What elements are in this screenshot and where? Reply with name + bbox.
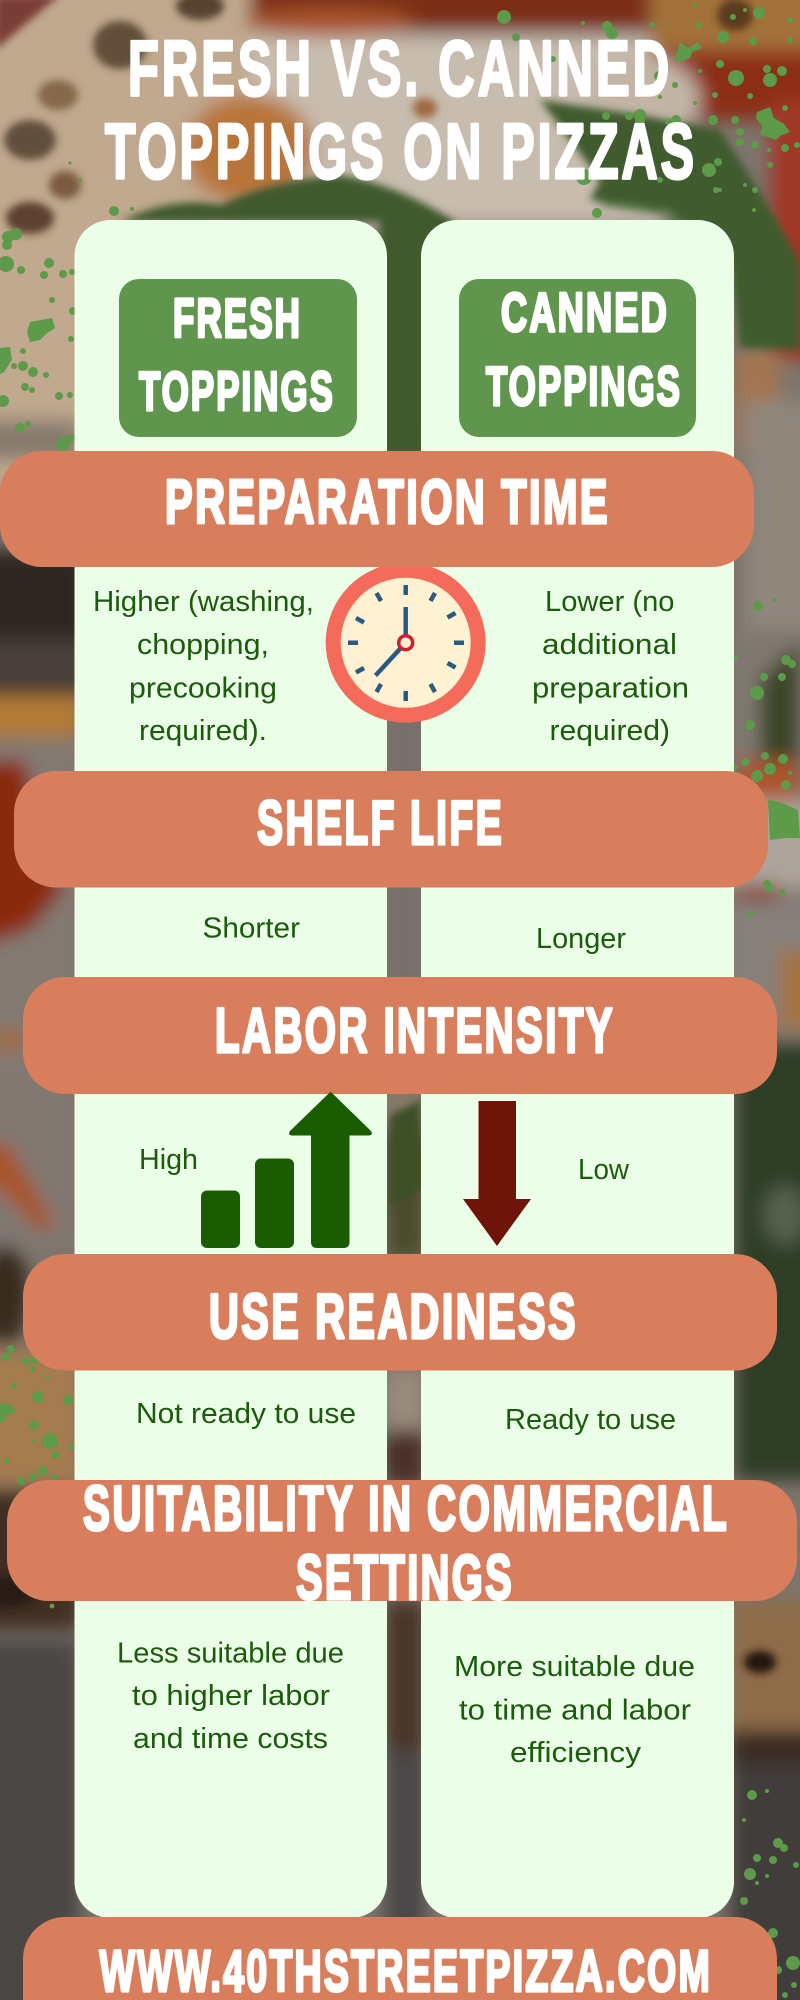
text: more suitable	[454, 1651, 695, 1769]
heading: fresh toppings: FRESH	[173, 287, 302, 349]
panel: canned toppings column	[421, 220, 734, 1918]
text: less suitable	[117, 1638, 344, 1755]
text: less suitable: and time costs	[133, 1723, 328, 1755]
heading: canned toppings: TOPPINGS	[486, 355, 682, 417]
text: fresh preparation time	[93, 586, 314, 747]
text: more suitable: to time and labor	[459, 1694, 691, 1726]
text: more suitable: efficiency	[510, 1737, 642, 1769]
banner: shelf life: SHELF LIFE	[257, 789, 504, 858]
text: low: Low	[578, 1154, 630, 1186]
text: canned preparation time: preparation	[532, 672, 689, 704]
text: less suitable: to higher labor	[132, 1680, 330, 1712]
text: canned preparation time: additional	[542, 629, 677, 661]
heading: canned toppings: CANNED	[501, 281, 669, 343]
icon: clock	[326, 563, 486, 723]
text: fresh preparation time: precooking	[129, 672, 277, 704]
title	[105, 24, 697, 195]
text: shorter: Shorter	[202, 912, 300, 944]
icon: rising bars with up arrow	[201, 1092, 372, 1248]
text: fresh preparation time: required).	[139, 715, 267, 747]
heading: fresh toppings	[119, 279, 357, 437]
text: fresh preparation time: chopping,	[137, 629, 269, 661]
text: canned preparation time	[532, 586, 689, 747]
banner: use readiness: USE READINESS	[209, 1282, 578, 1352]
text: not ready to use: Not ready to use	[136, 1398, 356, 1430]
footer banner: website	[23, 1917, 777, 2000]
banner: use readiness	[23, 1254, 777, 1370]
banner: suitability in commercial settings	[7, 1474, 797, 1613]
banner: shelf life	[14, 771, 768, 888]
icon: down arrow	[463, 1101, 531, 1246]
panel: fresh toppings column	[74, 220, 387, 1918]
heading: fresh toppings: TOPPINGS	[139, 360, 335, 422]
banner: suitability in commercial settings: SETTINGS	[296, 1543, 514, 1613]
text: high: High	[139, 1144, 198, 1176]
text: fresh preparation time: Higher (washing,	[93, 586, 314, 618]
text: ready to use: Ready to use	[505, 1404, 676, 1436]
text: less suitable: Less suitable due	[117, 1638, 344, 1670]
text: canned preparation time: Lower (no	[545, 586, 674, 618]
heading: canned toppings	[459, 279, 696, 437]
banner: preparation time	[0, 451, 754, 567]
text: more suitable: More suitable due	[454, 1651, 695, 1683]
text: canned preparation time: required)	[550, 715, 670, 747]
banner: labor intensity	[23, 977, 777, 1094]
text: longer: Longer	[536, 923, 626, 955]
